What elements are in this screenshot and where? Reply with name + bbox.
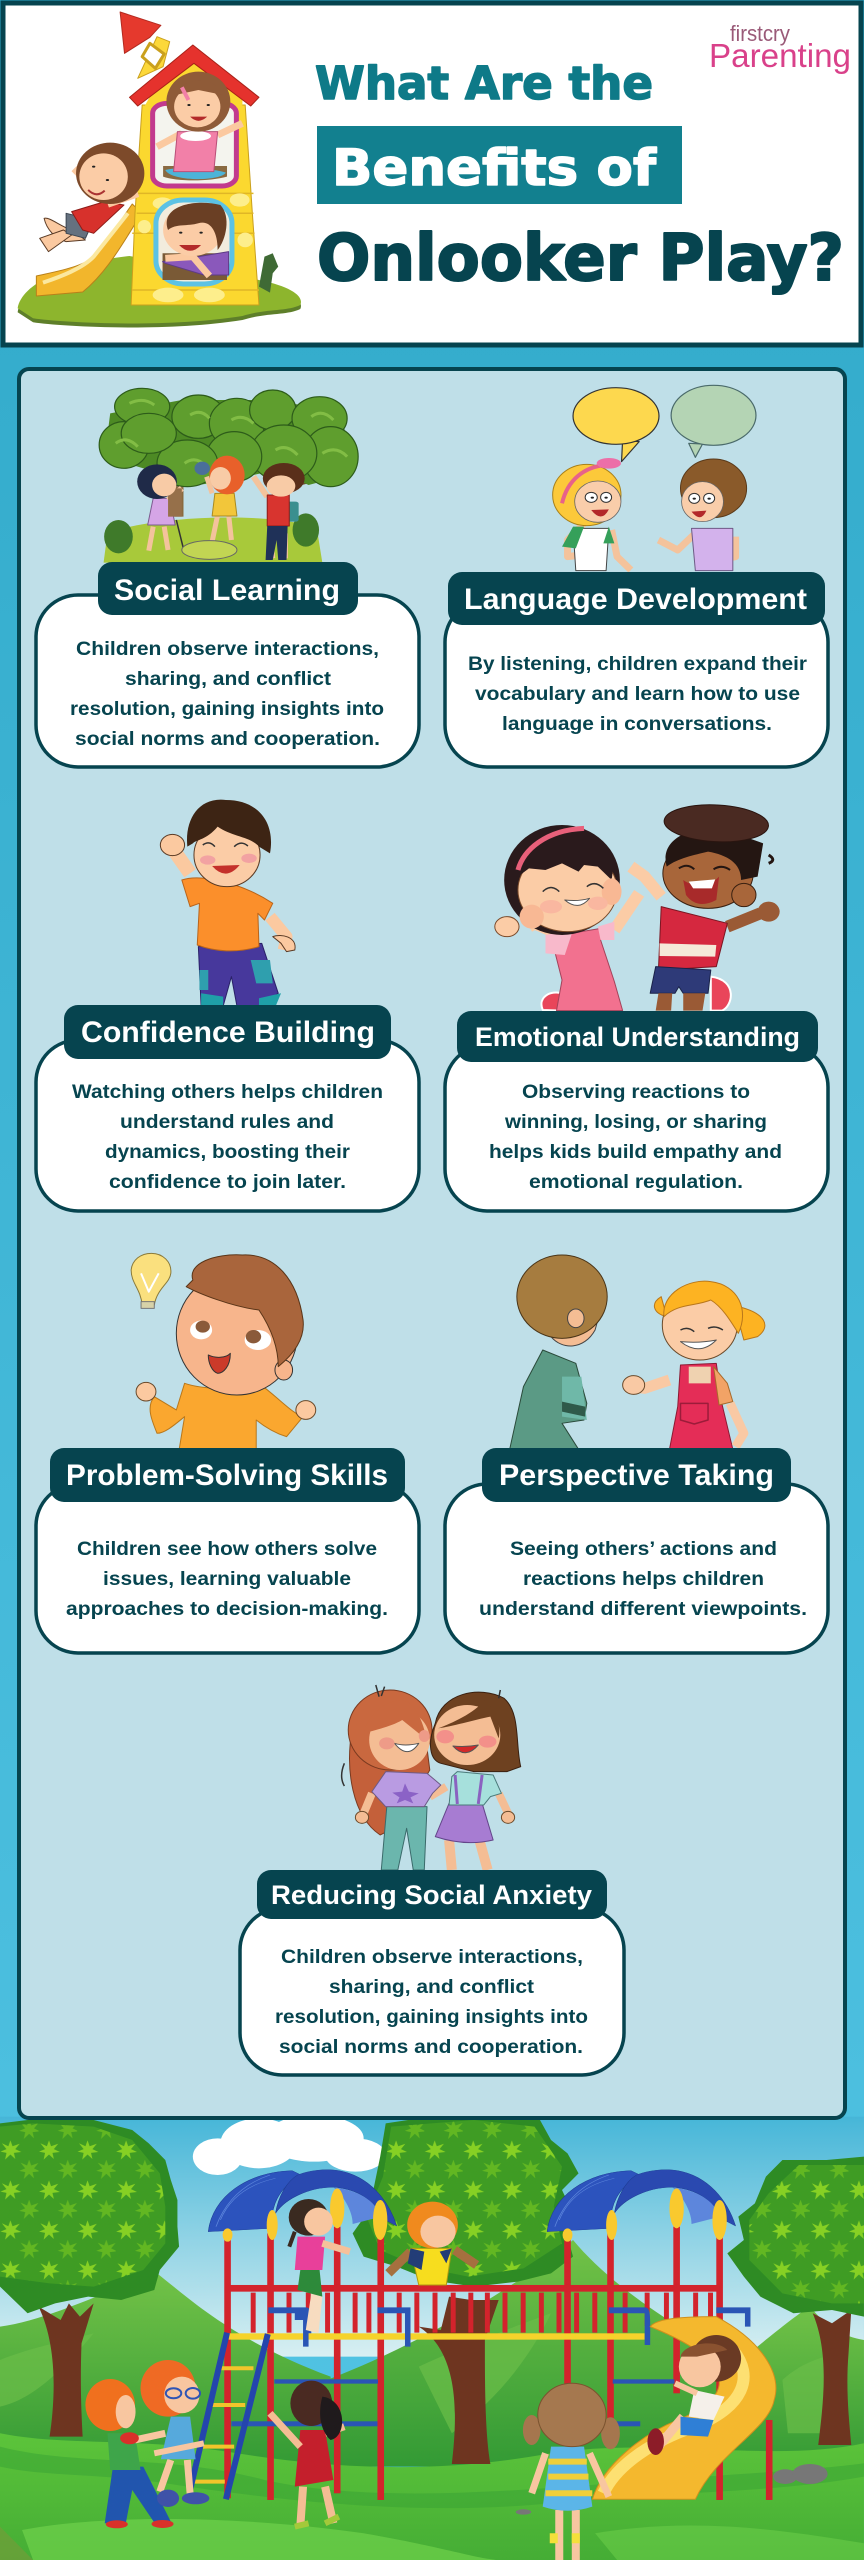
body text: Watching others helps children (72, 1081, 383, 1103)
panel: problem-solving skills (36, 1253, 419, 1653)
body text: approaches to decision-making. (66, 1598, 388, 1620)
body text: understand different viewpoints. (479, 1598, 807, 1620)
body text: sharing, and conflict (329, 1976, 535, 1998)
body text: Observing reactions to (522, 1081, 750, 1103)
body text: resolution, gaining insights into (275, 2006, 588, 2028)
title pill (64, 1005, 391, 1059)
child: girl with glasses (141, 2360, 209, 2507)
icon: waving boy (160, 800, 295, 1007)
body text: emotional regulation. (529, 1171, 743, 1193)
body text: social norms and cooperation. (279, 2036, 583, 2058)
heading: What Are the: What Are the (315, 57, 653, 110)
body text: Children observe interactions, (281, 1946, 583, 1968)
heading: Benefits of: Benefits of (332, 139, 657, 197)
panel: social learning (36, 388, 419, 767)
title pill (257, 1870, 607, 1919)
body text (479, 1538, 807, 1620)
cloud (193, 2115, 386, 2175)
body text: reactions helps children (523, 1568, 764, 1590)
body text: resolution, gaining insights into (70, 698, 384, 720)
body text: issues, learning valuable (103, 1568, 351, 1590)
child: boy on slide (647, 2335, 741, 2455)
body text: helps kids build empathy and (489, 1141, 782, 1163)
body text: Seeing others’ actions and (510, 1538, 777, 1560)
title pill: Confidence Building (81, 1016, 375, 1049)
main light blue panel (19, 369, 845, 2118)
trees (0, 2117, 864, 2464)
panel: perspective taking (445, 1255, 828, 1653)
body text: confidence to join later. (109, 1171, 346, 1193)
title pill (98, 562, 358, 615)
icon: two happy children (495, 802, 780, 1011)
body text: social norms and cooperation. (75, 728, 380, 750)
yellow slide (592, 2317, 776, 2499)
title pill: Perspective Taking (499, 1459, 774, 1492)
playground scene (0, 2115, 864, 2560)
panel: language development (445, 385, 828, 767)
child: ginger boy with green shirt (85, 2379, 174, 2528)
title pill (482, 1448, 791, 1502)
title pill: Language Development (464, 583, 807, 616)
heading: Benefits of (317, 126, 682, 204)
child: polka dot dress girl (270, 2381, 344, 2527)
icon: two girl friends (342, 1685, 521, 1870)
ground (0, 2433, 864, 2560)
body text (489, 1081, 782, 1193)
icon: boy and girl talking (510, 1255, 765, 1449)
heading: Onlooker Play?: Onlooker Play? (317, 222, 844, 296)
ladder (190, 2333, 268, 2499)
title pill: Problem-Solving Skills (66, 1459, 388, 1492)
child: girl from behind (523, 2383, 620, 2560)
header panel (3, 3, 861, 345)
title pill: Emotional Understanding (475, 1022, 800, 1052)
body text: By listening, children expand their (468, 653, 807, 675)
illustration: children on playhouse tower (18, 12, 301, 327)
body text: vocabulary and learn how to use (475, 683, 800, 705)
title pill (448, 572, 825, 625)
body text: sharing, and conflict (125, 668, 332, 690)
body text (275, 1946, 588, 2058)
rocks (516, 2464, 828, 2515)
panel: confidence building (36, 800, 419, 1211)
title pill: Reducing Social Anxiety (271, 1880, 592, 1910)
body text (468, 653, 807, 735)
body text: Children observe interactions, (76, 638, 379, 660)
body text: understand rules and (120, 1111, 334, 1133)
logo: FirstCry Parenting: Parenting (709, 37, 851, 74)
title pill (50, 1448, 405, 1502)
panel: emotional understanding (445, 802, 828, 1211)
icon: children under trees (99, 388, 358, 563)
icon: boy with lightbulb (131, 1253, 316, 1450)
logo: FirstCry Parenting (709, 21, 851, 74)
panel: reducing social anxiety (240, 1685, 624, 2075)
title pill (457, 1011, 818, 1062)
title pill: Social Learning (114, 574, 340, 607)
play structure (190, 2170, 776, 2500)
hills (0, 2273, 331, 2467)
body text: dynamics, boosting their (105, 1141, 350, 1163)
body text: language in conversations. (502, 713, 772, 735)
body text (72, 1081, 383, 1193)
body text (70, 638, 384, 750)
body text: winning, losing, or sharing (504, 1111, 767, 1133)
logo: FirstCry Parenting: firstcry (730, 21, 790, 46)
child: orange hair boy (388, 2202, 477, 2285)
body text: Children see how others solve (77, 1538, 377, 1560)
icon: two children talking (553, 385, 756, 571)
child: pink shirt girl (289, 2199, 350, 2333)
body text (66, 1538, 388, 1620)
